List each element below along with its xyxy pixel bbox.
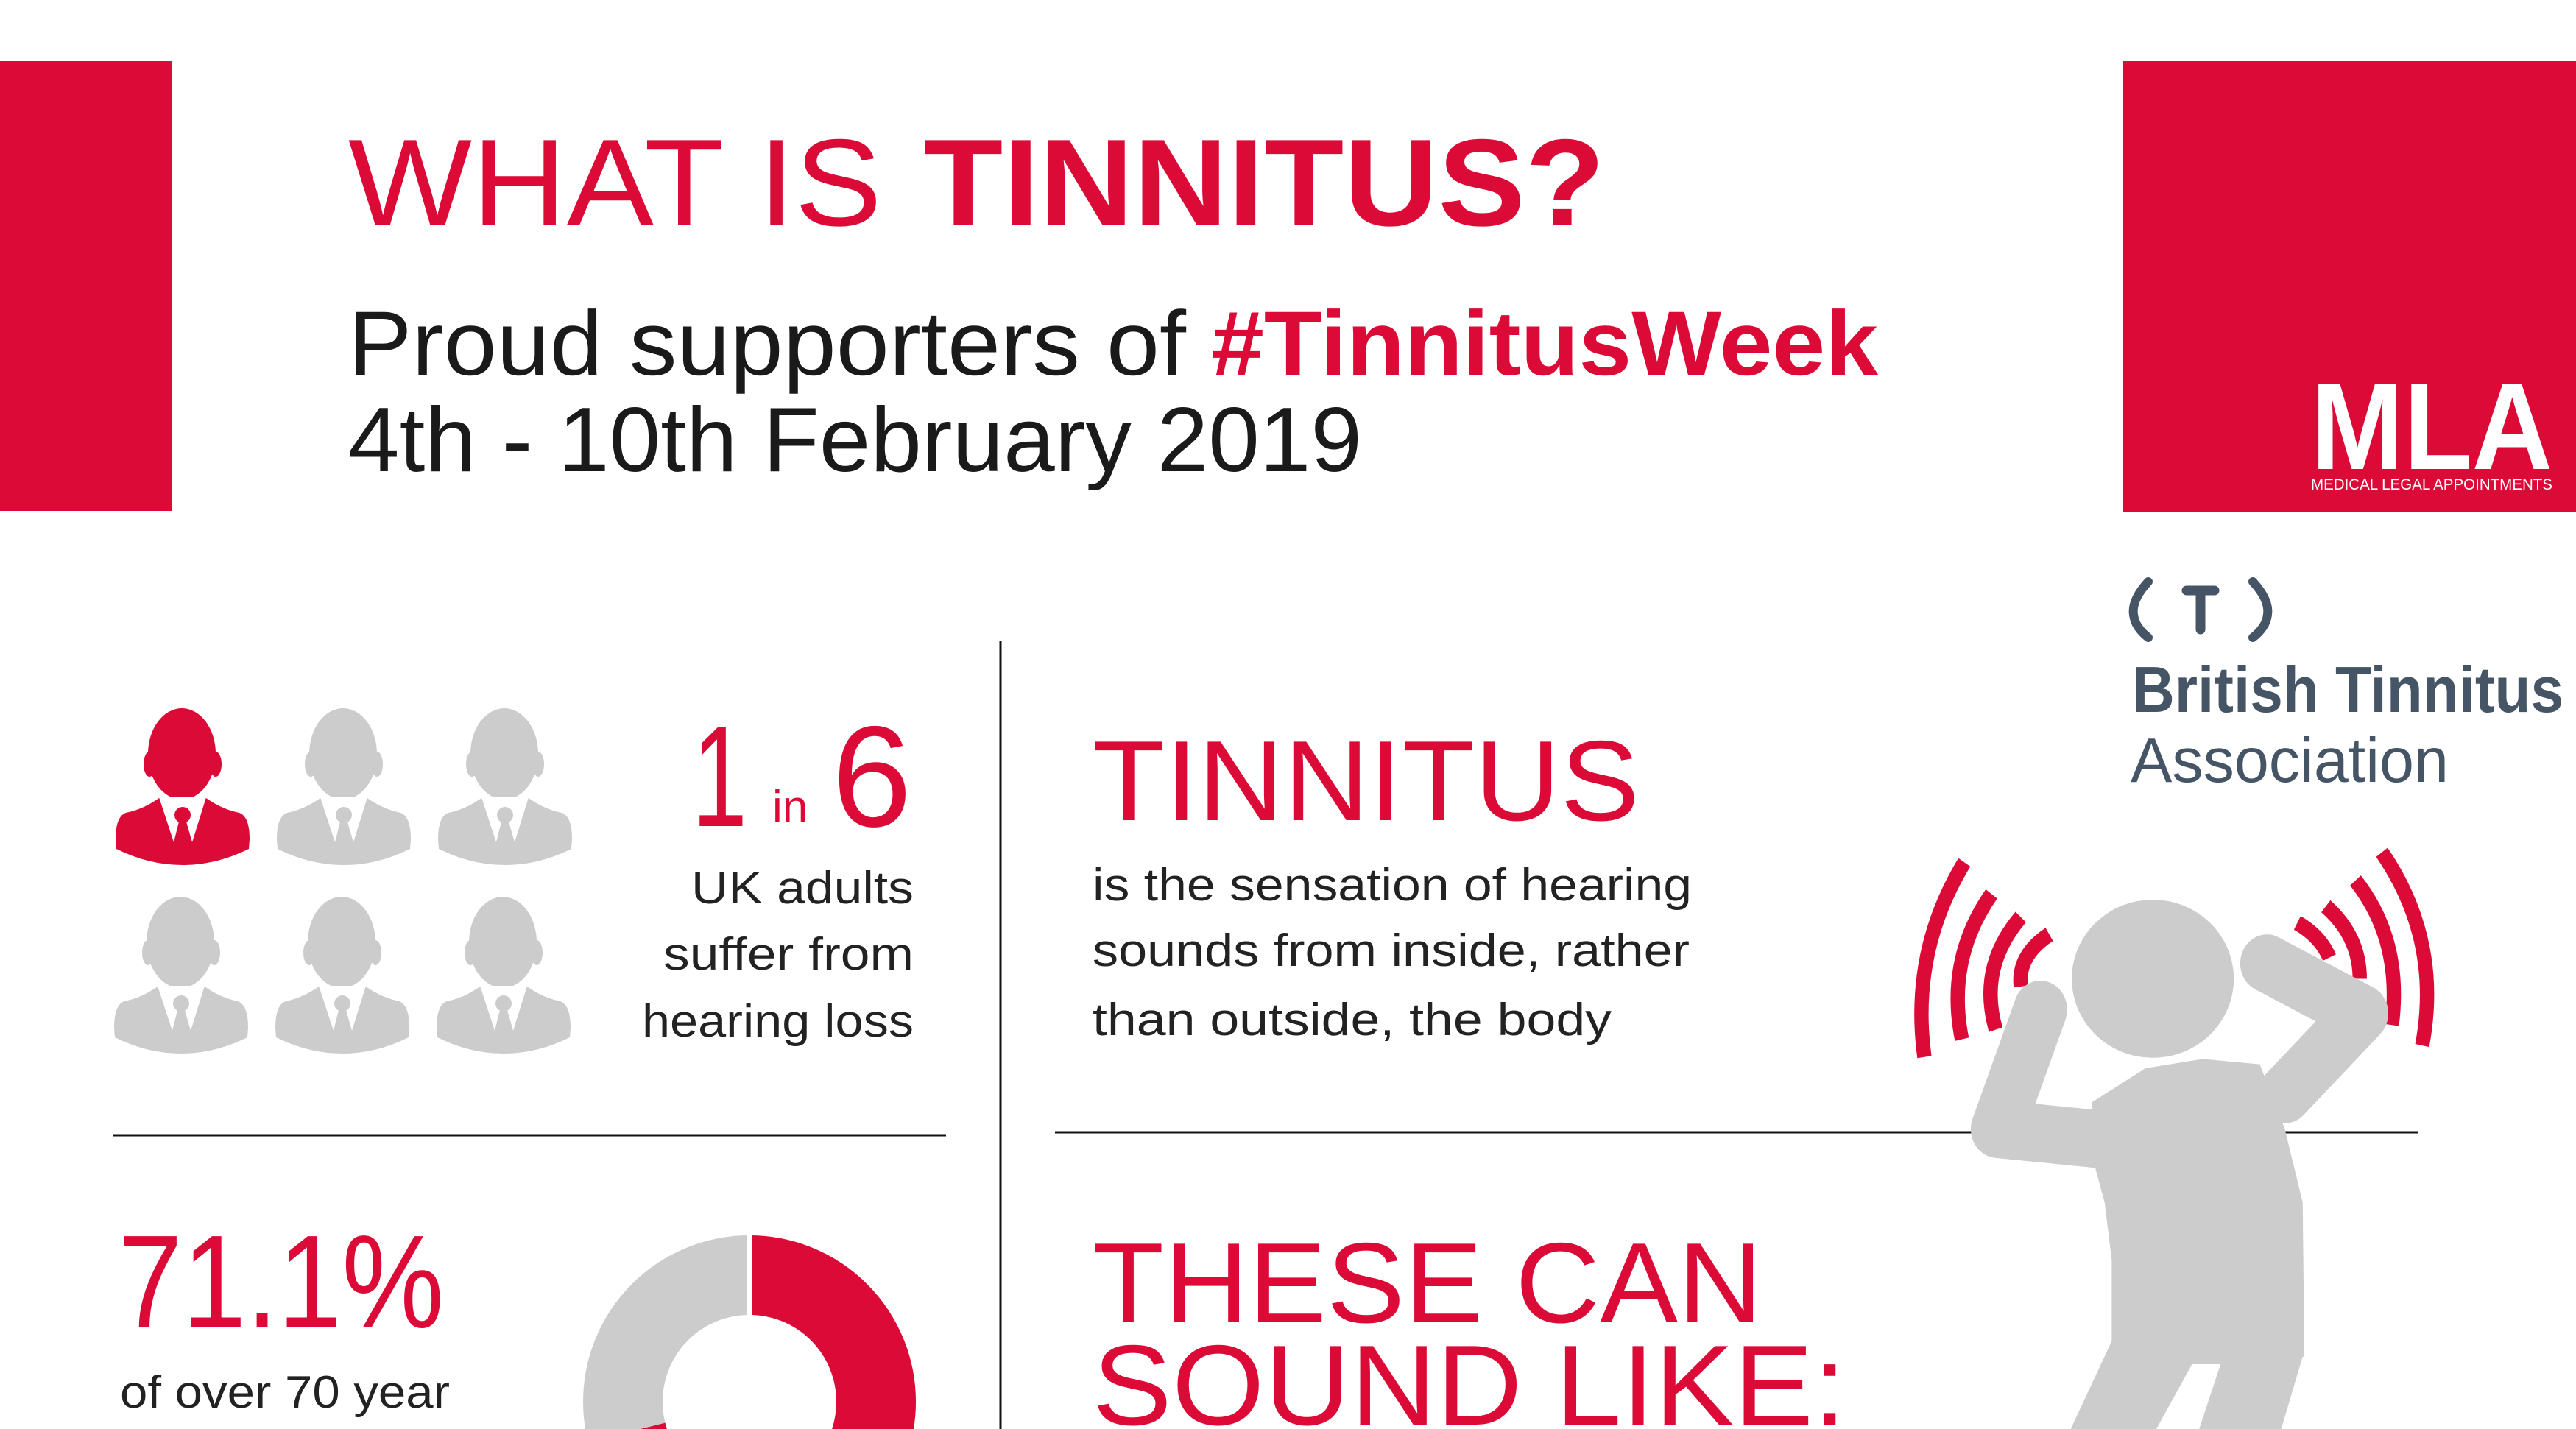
- title: WHAT IS: [348, 113, 882, 252]
- stat: 71.1%: 71.1%: [119, 1208, 444, 1356]
- British Tinnitus Association logo: [2131, 582, 2563, 796]
- stat: 1 in 6: 6: [832, 696, 911, 857]
- heading: these can sound like: THESE CAN: [1093, 1219, 1762, 1347]
- definition text: is the sensation of hearing: [1093, 860, 1692, 911]
- definition text: sounds from inside, rather: [1093, 925, 1690, 976]
- MLA logo: MEDICAL LEGAL APPOINTMENTS: [2311, 476, 2552, 493]
- title: TINNITUS?: [923, 113, 1605, 252]
- British Tinnitus Association logo: Association: [2131, 726, 2449, 796]
- heading: TINNITUS: TINNITUS: [1093, 717, 1640, 844]
- heading: these can sound like: [1093, 1219, 1846, 1429]
- title: [348, 113, 1605, 252]
- stat: 1 in 6: in: [772, 782, 808, 833]
- stat: 1 in 6: [692, 696, 911, 857]
- MLA logo: MLA: [2311, 357, 2552, 495]
- people icons: 1 in 6: [114, 708, 572, 1054]
- text: of over 70 year: of over 70 year: [120, 1367, 450, 1418]
- subtitle: Proud supporters of: [348, 293, 1187, 395]
- subtitle: #TinnitusWeek: [1211, 293, 1879, 395]
- definition text: than outside, the body: [1093, 995, 1612, 1045]
- subtitle: 4th - 10th February 2019: [348, 389, 1362, 491]
- subtitle: [348, 293, 1879, 491]
- text: UK adults suffer from hearing loss: UK adults: [691, 863, 914, 914]
- illustration: person covering ears with sound waves: [1922, 853, 2427, 1429]
- text: UK adults suffer from hearing loss: hearing loss: [642, 996, 914, 1047]
- text: UK adults suffer from hearing loss: [642, 863, 914, 1047]
- text: UK adults suffer from hearing loss: suffer from: [663, 929, 914, 980]
- left red bar: [0, 61, 172, 511]
- MLA logo: [2123, 61, 2576, 512]
- donut chart: [623, 1231, 876, 1429]
- definition text: [1093, 860, 1692, 1045]
- vertical divider: [1000, 641, 1001, 1429]
- stat: 1 in 6: 1: [692, 696, 747, 857]
